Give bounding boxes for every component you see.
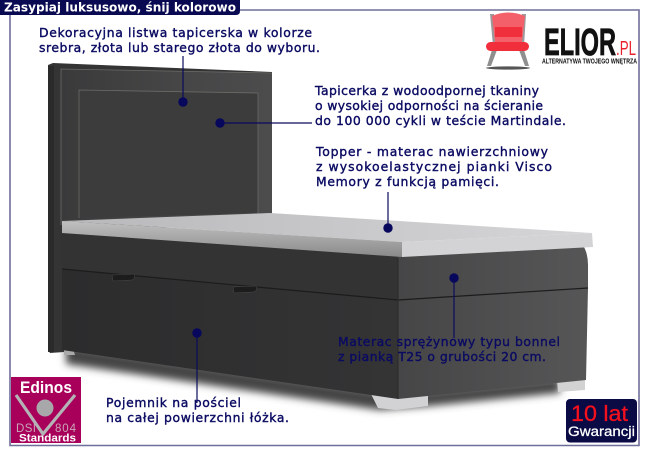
mattress and base — [62, 232, 588, 399]
callout: storage — [106, 328, 289, 425]
logo: Elior — [486, 12, 637, 70]
headboard — [48, 63, 272, 353]
heading banner: Zasypiaj luksusowo, śnij kolorowo — [4, 0, 236, 14]
badge: Edinos DSI 804 Standards: 804 — [55, 423, 77, 435]
foot: left — [64, 346, 75, 355]
callout: upholstery: do 100 000 cykli w teście Martindale. — [315, 113, 566, 128]
callout: decorative strip: Dekoracyjna listwa tapicerska w kolorze — [39, 25, 312, 40]
badge: Edinos DSI 804 Standards: DSI — [16, 423, 36, 435]
callout: topper: Topper - materac nawierzchniowy — [315, 144, 548, 159]
handle — [233, 286, 257, 293]
callout: bonnel mattress: Materac sprężynowy typu bonnel — [338, 334, 560, 349]
callout: storage: Pojemnik na pościel — [106, 395, 241, 410]
callout: topper: Memory z funkcją pamięci. — [316, 174, 499, 189]
floor shadow — [66, 345, 560, 410]
logo: Elior: .PL — [616, 38, 636, 60]
callout: topper — [315, 144, 552, 233]
badge: 10 lat warranty — [566, 399, 637, 442]
icon: red chair — [486, 12, 530, 70]
bed illustration — [48, 63, 593, 410]
badge: 10 lat warranty: Gwarancji — [568, 424, 635, 439]
foot: right — [557, 378, 585, 392]
callout: decorative strip — [39, 25, 320, 107]
badge: Edinos DSI 804 Standards — [11, 377, 81, 444]
handle — [112, 274, 135, 281]
callout: storage: na całej powierzchni łóżka. — [106, 410, 289, 425]
foot: front — [371, 394, 428, 410]
icon: gray V with circle — [16, 395, 75, 434]
callout: decorative strip: srebra, złota lub starego złota do wyboru. — [39, 40, 320, 55]
callout: upholstery: Tapicerka z wodoodpornej tkaniny — [314, 83, 539, 98]
badge: Edinos DSI 804 Standards: Edinos — [20, 379, 72, 397]
topper — [62, 213, 593, 257]
callout: bonnel mattress: z pianką T25 o grubości 20 cm. — [338, 349, 546, 364]
callout: upholstery: o wysokiej odporności na ścieranie — [315, 98, 543, 113]
callout: bonnel mattress — [338, 273, 560, 364]
badge: 10 lat warranty: 10 lat — [571, 401, 628, 426]
callout: topper: z wysokoelastycznej pianki Visco — [316, 159, 552, 174]
callout: upholstery — [215, 83, 566, 128]
badge: Edinos DSI 804 Standards: Standards — [19, 432, 76, 444]
